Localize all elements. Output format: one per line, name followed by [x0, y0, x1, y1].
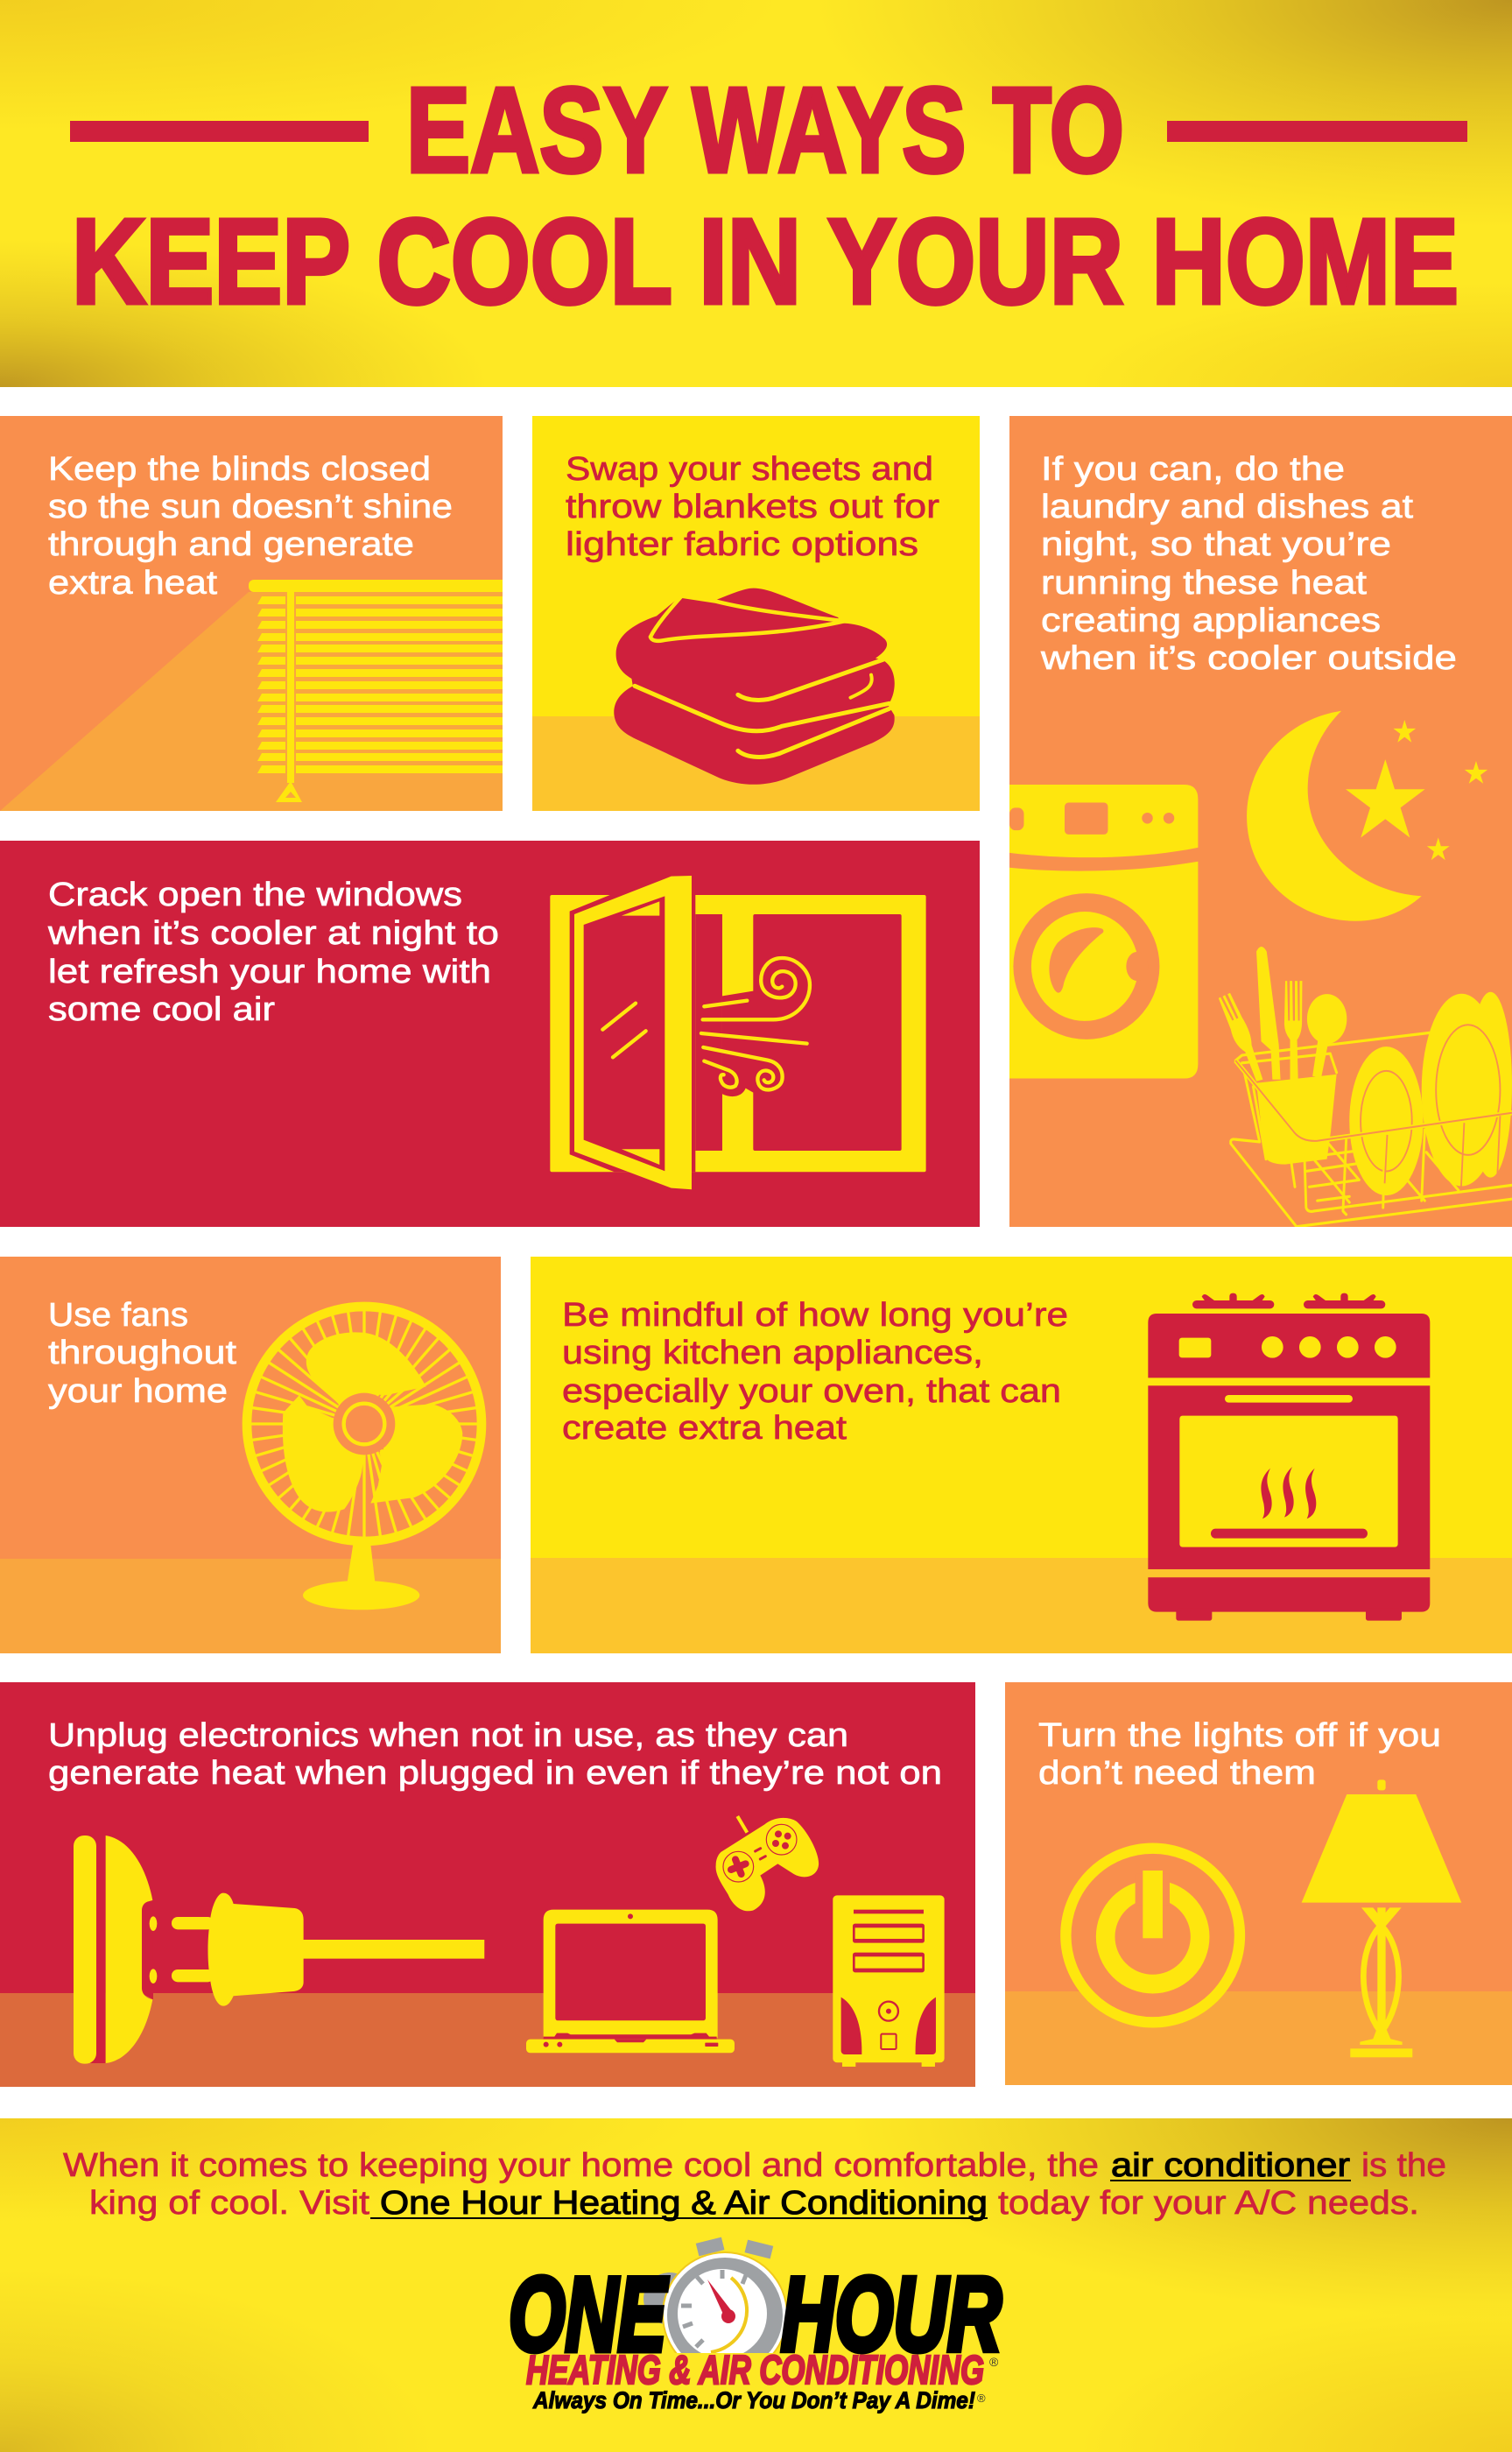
icon: plug and outlet	[74, 1835, 484, 2064]
text: windows tip: some cool air	[48, 991, 275, 1028]
icon: laptop	[526, 1910, 735, 2053]
text: laundry tip: laundry and dishes at	[1041, 489, 1414, 525]
icon: table lamp	[1302, 1779, 1461, 2057]
text: kitchen tip	[562, 1297, 1068, 1447]
icon: washing machine	[1009, 785, 1198, 1079]
floor band	[532, 716, 980, 811]
text: windows tip: Crack open the windows	[48, 877, 462, 913]
logo subtitle: HEATING & AIR CONDITIONING	[526, 2347, 984, 2392]
text: blinds tip: Keep the blinds closed	[48, 451, 431, 488]
icon: moon and stars	[1247, 711, 1487, 921]
text: kitchen tip: create extra heat	[562, 1410, 847, 1447]
text: fans tip	[48, 1297, 237, 1410]
panel: blinds	[0, 416, 503, 811]
text: kitchen tip: especially your oven, that can	[562, 1373, 1061, 1410]
panel: sheets and blankets	[532, 416, 980, 811]
icon: window blinds	[249, 580, 503, 802]
title rule right	[1167, 121, 1467, 142]
logo tagline: Always On Time...Or You Don’t Pay A Dime!	[532, 2387, 975, 2413]
panel: open windows	[0, 841, 980, 1227]
text: lights tip: don’t need them	[1038, 1755, 1316, 1792]
text: unplug tip	[48, 1717, 942, 1792]
text: sheets tip: throw blankets out for	[566, 489, 939, 525]
text: sheets tip	[566, 451, 939, 563]
logo word HOUR: HOUR	[781, 2256, 1002, 2373]
text: laundry tip	[1040, 451, 1457, 677]
text: fans tip: Use fans	[48, 1297, 188, 1334]
text: laundry tip: night, so that you’re	[1041, 526, 1391, 563]
panel: laundry and dishes	[1009, 416, 1512, 1227]
text: blinds tip: so the sun doesn’t shine	[48, 489, 453, 525]
text: unplug tip: Unplug electronics when not in use, as they can	[48, 1717, 848, 1754]
text: laundry tip: If you can, do the	[1041, 451, 1345, 488]
text: lights tip	[1038, 1717, 1441, 1792]
title rule left	[70, 121, 369, 142]
floor band	[0, 1993, 975, 2087]
registered mark: ®	[989, 2355, 999, 2369]
logo: One Hour Heating and Air Conditioning	[509, 2237, 1002, 2413]
icon: open window with wind	[550, 876, 926, 1189]
call to action text: air conditioner	[1111, 2147, 1350, 2184]
text: blinds tip: extra heat	[48, 565, 218, 602]
icon: stopwatch	[643, 2237, 786, 2353]
floor band	[1005, 1991, 1512, 2085]
call to action text: When it comes to keeping your home cool and comfortable, the	[63, 2147, 1099, 2184]
text: fans tip: your home	[48, 1373, 228, 1410]
text: windows tip	[47, 877, 499, 1028]
icon: dish rack	[1219, 947, 1512, 1227]
text: laundry tip: when it’s cooler outside	[1040, 640, 1457, 677]
text: laundry tip: creating appliances	[1041, 602, 1381, 639]
text: sheets tip: Swap your sheets and	[566, 451, 933, 488]
text: sheets tip: lighter fabric options	[566, 526, 918, 563]
icon: folded blanket	[614, 588, 895, 785]
icon: game controller	[716, 1816, 819, 1911]
text: windows tip: when it’s cooler at night to	[47, 915, 499, 952]
text: windows tip: let refresh your home with	[48, 954, 491, 990]
text: lights tip: Turn the lights off if you	[1038, 1717, 1441, 1754]
call to action text: king of cool. Visit	[89, 2185, 369, 2222]
logo word ONE: ONE	[509, 2256, 669, 2373]
panel: kitchen appliances	[531, 1257, 1512, 1653]
sunlight beam	[0, 592, 503, 811]
text: kitchen tip: Be mindful of how long you’re	[562, 1297, 1068, 1334]
call to action text: One Hour Heating & Air Conditioning	[380, 2185, 988, 2222]
call to action text: today for your A/C needs.	[998, 2185, 1419, 2222]
icon: oven	[1148, 1293, 1430, 1621]
icon: power button	[1065, 1849, 1240, 2022]
floor band	[0, 1559, 501, 1653]
registered mark: ®	[977, 2392, 986, 2405]
icon: desk fan	[247, 1307, 482, 1610]
text: unplug tip: generate heat when plugged in even if they’re not on	[48, 1755, 942, 1792]
header banner	[0, 0, 1512, 387]
text: kitchen tip: using kitchen appliances,	[562, 1335, 983, 1371]
panel: fans	[0, 1257, 501, 1653]
call to action text: is the	[1361, 2147, 1446, 2184]
text: blinds tip: through and generate	[48, 526, 414, 563]
title line 1: EASY WAYS TO	[406, 63, 1124, 198]
panel: lights	[1005, 1682, 1512, 2085]
text: laundry tip: running these heat	[1041, 565, 1368, 602]
text: fans tip: throughout	[48, 1335, 237, 1371]
icon: computer tower	[833, 1895, 945, 2067]
text: blinds tip	[48, 451, 453, 602]
floor band	[531, 1558, 1512, 1653]
call to action text	[63, 2147, 1446, 2222]
panel: unplug electronics	[0, 1682, 975, 2087]
footer banner	[0, 2118, 1512, 2452]
